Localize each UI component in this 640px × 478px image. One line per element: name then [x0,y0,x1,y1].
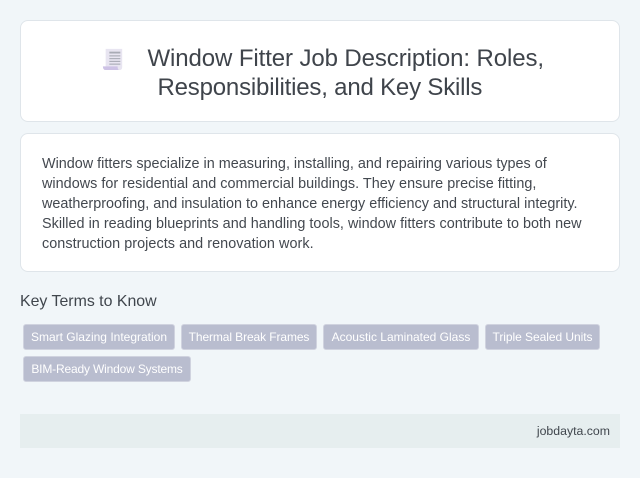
text block: description [42,156,582,252]
footer: source: jobdayta.com [537,424,610,438]
footer bar [20,414,620,448]
icon: document scroll [103,49,122,70]
panel: description card [20,133,620,272]
tag: Thermal Break Frames: Thermal Break Frames [189,330,309,344]
tag: BIM-Ready Window Systems [23,356,191,382]
tag: Acoustic Laminated Glass: Acoustic Laminated Glass [332,330,470,344]
text block: description: windows for residential and commercial buildings. They ensure precise fitting, [42,176,536,192]
text block: description: Window fitters specialize in measuring, installing, and repairing various types of [42,156,547,172]
text block: description: weatherproofing, and insulation to enhance energy efficiency and structural integrity. [42,196,577,212]
tag: Triple Sealed Units [485,324,600,350]
text block: description: construction projects and renovation work. [42,236,314,252]
panel: title card [20,20,620,122]
heading: title line 2: Responsibilities, and Key Skills [158,74,482,101]
tag: Smart Glazing Integration: Smart Glazing Integration [31,330,167,344]
tag: Smart Glazing Integration [23,324,175,350]
tag: BIM-Ready Window Systems: BIM-Ready Window Systems [31,362,183,376]
tag: Acoustic Laminated Glass [323,324,479,350]
heading: title line 1: Window Fitter Job Description: Roles, [148,45,544,72]
heading: key terms: Key Terms to Know [20,293,157,310]
tag: Triple Sealed Units: Triple Sealed Units [492,330,592,344]
text block: description: Skilled in reading blueprints and handling tools, window fitters contribute to both new [42,216,582,232]
tag: Thermal Break Frames [181,324,317,350]
